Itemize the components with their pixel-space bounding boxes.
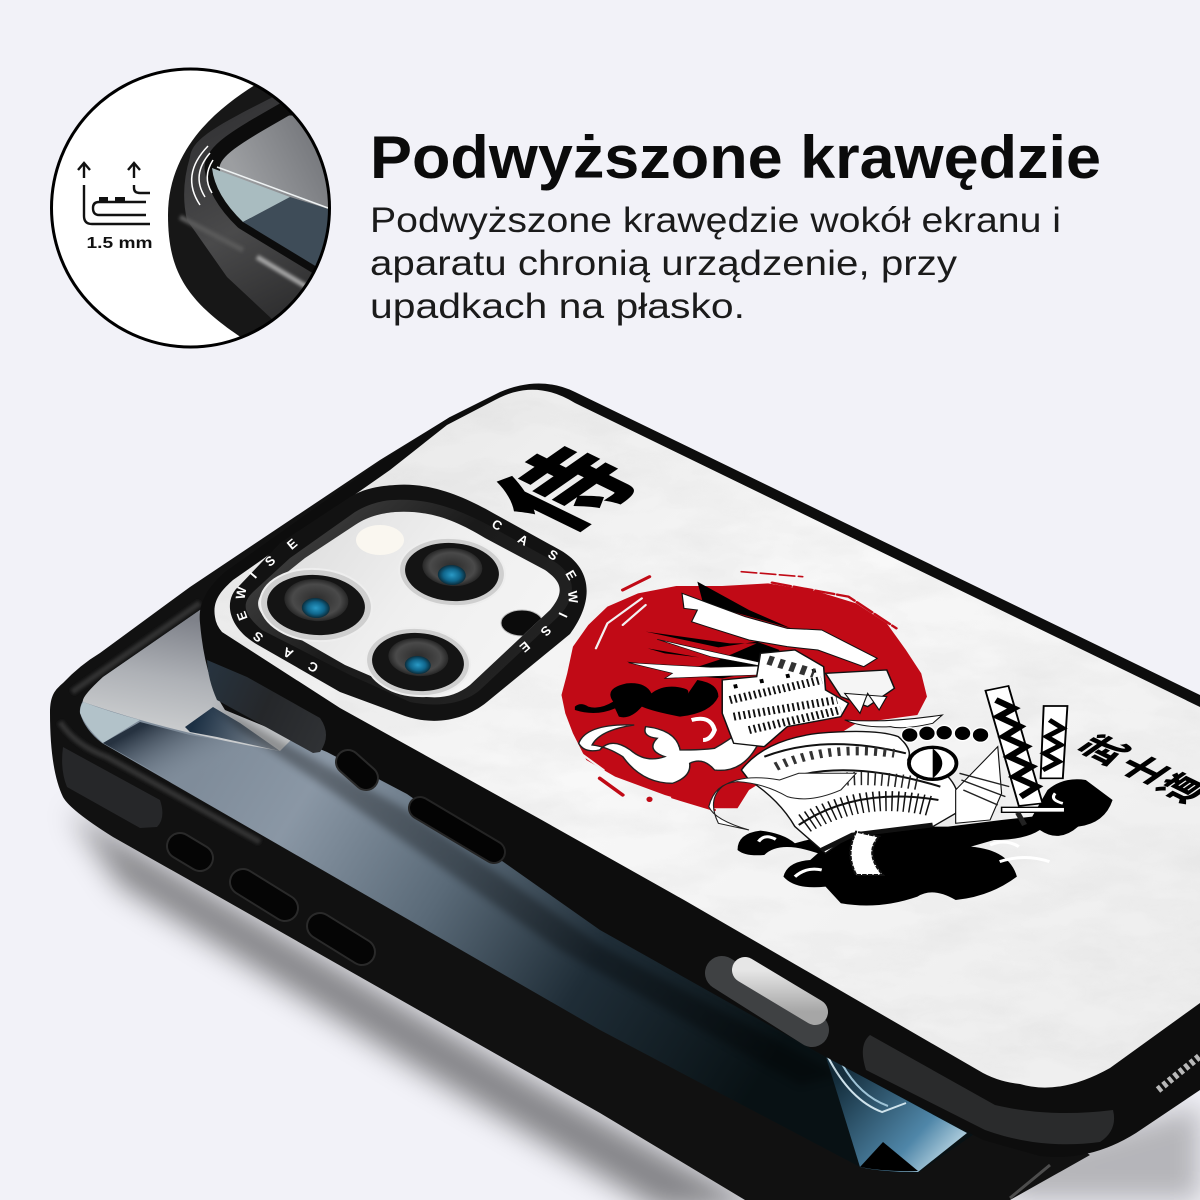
lens 1 [258,565,374,645]
camera island [230,485,587,721]
armor swirl emblem [909,747,1009,823]
black ink cloud bottom [738,779,1113,906]
camera ring inner lip [246,500,572,705]
kanji: samurai: 侍 [449,423,672,549]
white brush scratches [581,598,646,770]
brand lettering: C [489,516,505,534]
screen wallpaper teal band [80,702,140,743]
katana short [1041,706,1067,778]
brand lettering: S [537,623,554,640]
flash [356,525,404,555]
circle base [52,69,330,347]
lower armor skirt [741,731,958,853]
black horn wedges [627,582,791,678]
back phone button: action [180,846,200,858]
brand lettering: I [555,610,571,620]
charging port [722,970,815,1030]
brand lettering: S [545,546,561,564]
swoosh in wallpaper [826,1057,967,1172]
kanji: bushido: 武 [1061,726,1142,771]
paint splatter [600,572,896,810]
rope tassel [850,832,883,875]
edge height label: 1.5 mm [86,235,152,252]
brand lettering: W [233,585,250,600]
back phone screen [80,560,980,1173]
frame bumper patch under camera [207,660,326,753]
brand lettering: A [515,531,531,549]
brand lettering: A [280,644,296,662]
back phone bumper patch [62,747,162,828]
brand lettering: S [262,552,278,570]
white lower tail [709,773,856,830]
mask teeth and tongue [845,693,942,728]
top phone case [200,384,1200,1157]
description text: Podwyższone krawędzie wokół ekranu i [370,201,1061,240]
lidar sensor [501,610,543,636]
brand lettering: C [305,658,321,676]
samurai illustration [561,572,1113,906]
brand lettering: I [246,569,260,581]
katana long [986,686,1065,825]
prayer beads [901,725,989,742]
pressure arcs [192,146,213,205]
black cloud left [575,680,718,717]
samurai mask head [826,670,894,707]
screen wallpaper dark slab [103,722,330,820]
white horns [628,639,764,678]
heading: Podwyższone krawędzie [370,124,1101,191]
white cloud with tail [579,707,776,783]
white helmet crest [682,593,877,667]
circle outline [52,69,330,347]
brand lettering: E [233,609,251,623]
brand lettering: S [250,628,266,646]
lens 3 [364,624,472,700]
side button: power [420,808,494,852]
back phone frame highlight [60,603,260,842]
camera ring outer [230,485,587,721]
speaker holes [1158,1056,1200,1090]
callout circle: raised edge detail [52,69,345,347]
camera glass plate [258,512,560,697]
drop shadow under phones [70,810,1200,1200]
back phone bottom highlights [1010,1165,1050,1198]
brand lettering: W [565,590,581,604]
upper armor [722,650,849,747]
kanji: bushido: 士 [1102,745,1183,791]
raised edge icon [78,163,150,224]
lens 2 [397,534,507,610]
back phone button: volume up [243,882,285,908]
zoomed corner photo [168,86,328,336]
curl top of cloud [692,719,715,740]
screen wallpaper dark wedge [185,707,280,751]
brand lettering: E [562,567,580,583]
back phone button: volume down [320,926,362,952]
red sun [561,583,927,808]
back phone case [50,417,1090,1200]
brand lettering: E [517,638,533,656]
white textured back panel [200,370,1200,1100]
screen wallpaper top grey [83,610,300,751]
frame bumper patch bottom [863,1035,1114,1144]
side button: silent vent [348,762,366,778]
description text: upadkach na płasko. [370,287,745,326]
top phone frame [200,384,1200,1157]
shadow of top phone on screen [215,705,840,1085]
brand lettering [233,516,581,676]
description text [370,201,1061,326]
description text: aparatu chronią urządzenie, przy [370,244,958,283]
back phone frame [50,417,1090,1200]
brand lettering: E [284,535,300,553]
